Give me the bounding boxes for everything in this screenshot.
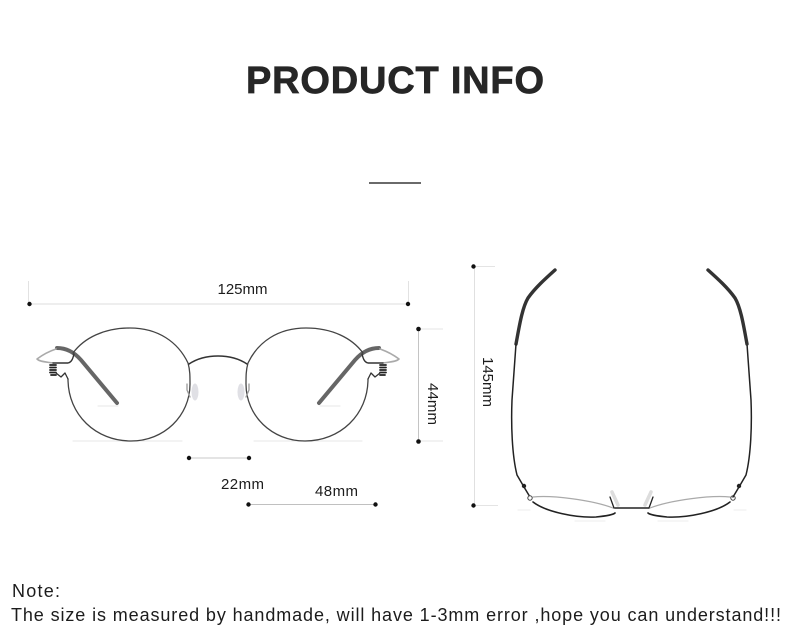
right hinge dots	[731, 484, 741, 500]
top view shadows	[518, 510, 746, 521]
dimension: total width 125mm: 125mm	[218, 281, 268, 298]
dimension: temple length 145mm	[471, 264, 498, 508]
dimension: total width 125mm	[27, 281, 410, 306]
right temple tip	[708, 270, 747, 344]
bridge	[189, 356, 247, 364]
title: PRODUCT INFO	[246, 60, 544, 102]
left temple tip	[516, 270, 555, 344]
note heading: Note:	[12, 581, 60, 601]
top view of glasses	[512, 270, 751, 521]
lens shadows	[73, 406, 362, 441]
dimension: bridge 22mm: 22mm	[221, 476, 264, 493]
right nose pad	[238, 384, 249, 400]
left lens rim	[68, 328, 190, 441]
left nose pad	[187, 384, 198, 400]
top view bridge	[615, 507, 649, 509]
note text: The size is measured by handmade, will have 1-3mm error ,hope you can understand!!!	[11, 605, 781, 625]
front view of glasses	[37, 328, 399, 441]
left temple wire	[512, 344, 530, 497]
dimension: lens height 44mm	[416, 327, 443, 444]
title underline rule	[369, 182, 421, 184]
right temple arm	[319, 348, 379, 403]
right lens	[648, 497, 730, 517]
dimension: bridge 22mm	[187, 456, 264, 493]
dimension: lens width 48mm	[246, 483, 378, 507]
dimension: temple length 145mm: 145mm	[479, 357, 496, 407]
right nose pad, top view	[645, 492, 653, 508]
left hinge and end piece	[37, 349, 74, 379]
left lens	[533, 497, 615, 517]
right lens rim	[246, 328, 368, 441]
right hinge and end piece	[362, 349, 399, 379]
left hinge dots	[522, 484, 532, 500]
left temple arm	[57, 348, 117, 403]
right temple wire	[733, 344, 751, 497]
dimension: lens height 44mm: 44mm	[424, 383, 441, 425]
dimension: lens width 48mm: 48mm	[315, 483, 358, 500]
left nose pad, top view	[610, 492, 618, 508]
